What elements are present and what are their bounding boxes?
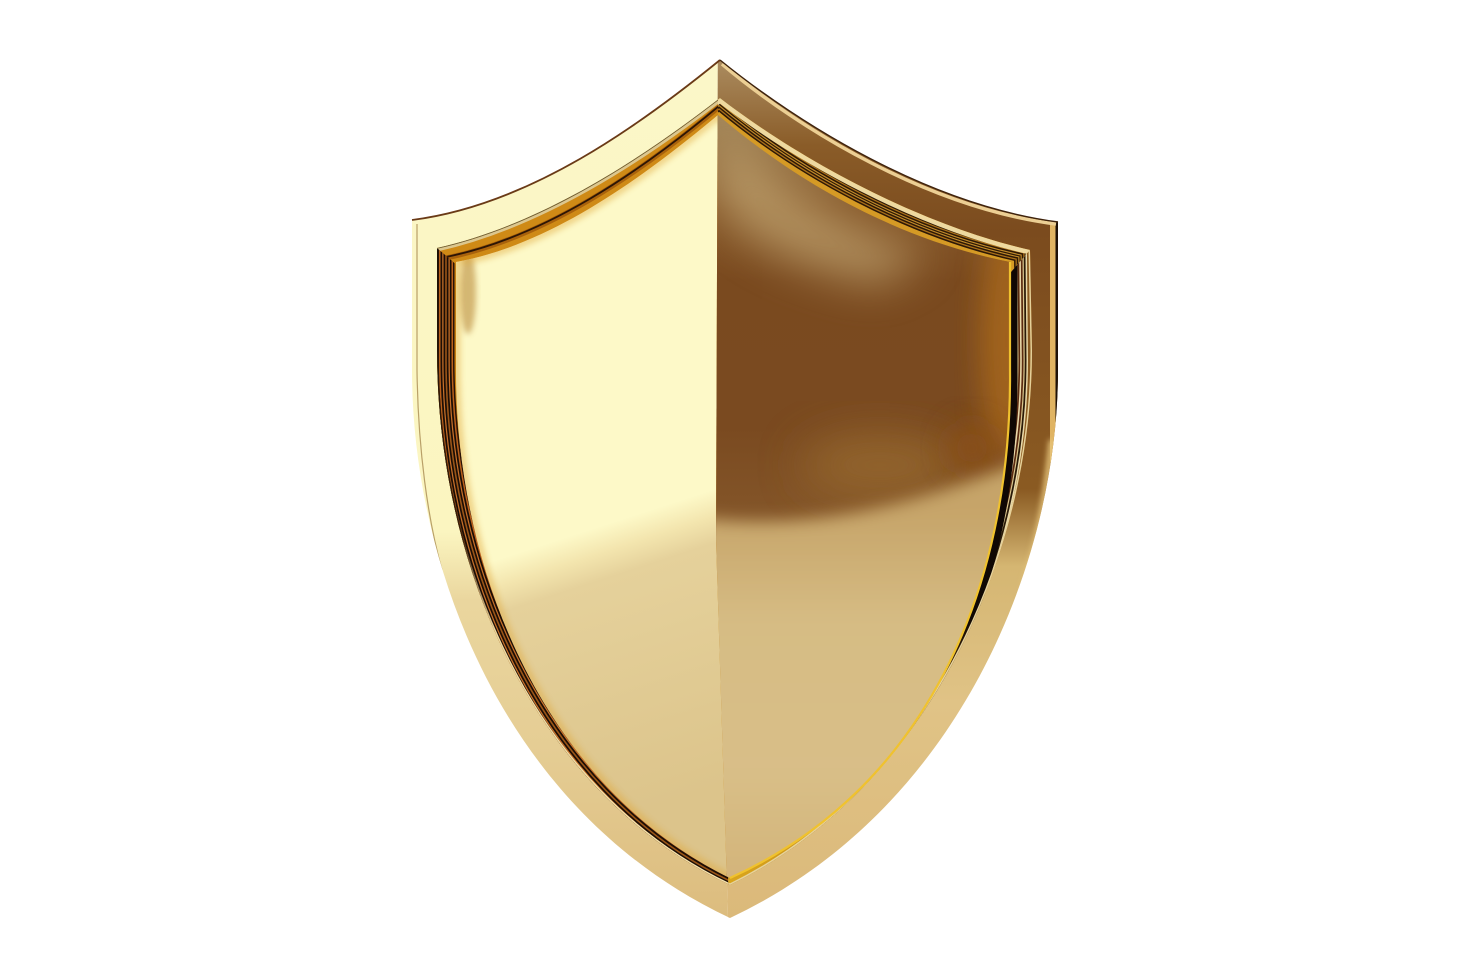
right face, dark bronze reflection	[716, 115, 1010, 878]
rim stripes: upper right	[718, 98, 1030, 272]
outer bevel of the shield	[412, 60, 1058, 918]
rim stripes: left side	[437, 249, 728, 884]
inner metallic rim	[437, 98, 1032, 885]
rim stripes: right side	[728, 250, 1032, 885]
main shield face	[456, 115, 1012, 879]
left face, bright reflection	[456, 116, 727, 876]
rim stripes: upper left	[437, 100, 718, 260]
illustration: golden shield	[412, 59, 1058, 918]
